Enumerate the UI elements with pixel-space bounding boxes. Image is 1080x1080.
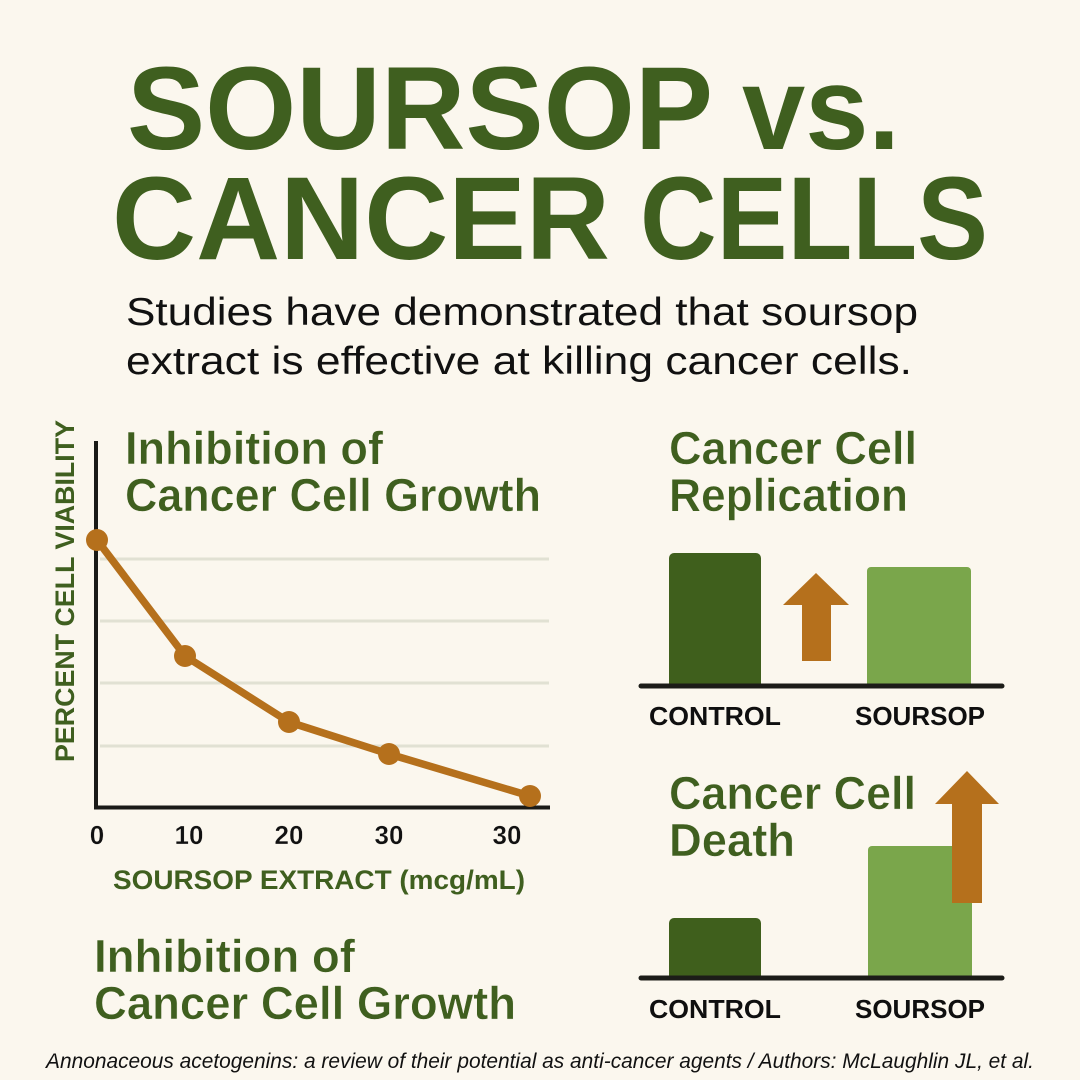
chart heading: Inhibition of <box>125 422 384 474</box>
lower left heading <box>94 930 516 1029</box>
replication heading: Replication <box>669 469 908 521</box>
chart axes <box>96 441 550 808</box>
x axis tick labels: 20 <box>275 820 303 850</box>
x axis tick labels: 0 <box>90 820 104 850</box>
lower left heading: Inhibition of <box>94 930 356 982</box>
control bar <box>669 553 761 685</box>
soursop bar <box>867 567 971 685</box>
soursop bar <box>868 846 972 977</box>
bar labels: SOURSOP <box>855 994 985 1024</box>
death heading: Cancer Cell <box>669 767 916 819</box>
title: vs. <box>742 43 900 175</box>
subtitle: Studies have demonstrated that soursop <box>126 291 918 334</box>
replication heading <box>669 422 917 521</box>
baseline <box>641 976 1002 980</box>
citation: Annonaceous acetogenins: a review of their potential as anti-cancer agents / Authors: McLaughlin JL, et al. <box>44 1050 1034 1073</box>
bar labels: CONTROL <box>649 994 781 1024</box>
x axis tick labels <box>90 820 521 850</box>
panel: cancer cell replication <box>641 422 1002 731</box>
bar labels: CONTROL <box>649 701 781 731</box>
title: CELLS <box>640 153 988 285</box>
x axis tick labels: 10 <box>175 820 203 850</box>
chart heading: Cancer Cell Growth <box>125 469 541 521</box>
y axis label: PERCENT CELL VIABILITY <box>50 420 80 762</box>
arrow: up <box>935 771 999 903</box>
bar labels: SOURSOP <box>855 701 985 731</box>
subtitle <box>126 291 918 383</box>
death heading: Death <box>669 814 795 866</box>
death heading <box>669 767 916 866</box>
title <box>112 43 988 285</box>
bar labels <box>649 994 985 1024</box>
subtitle: extract is effective at killing cancer cells. <box>126 340 912 383</box>
replication heading: Cancer Cell <box>669 422 917 474</box>
panel: cancer cell death <box>641 767 1002 1024</box>
chart heading <box>125 422 541 521</box>
baseline <box>641 684 1002 688</box>
bar labels <box>649 701 985 731</box>
x axis tick labels: 30 <box>493 820 521 850</box>
panel: line chart <box>50 420 550 895</box>
lower left heading: Cancer Cell Growth <box>94 977 516 1029</box>
x axis tick labels: 30 <box>375 820 403 850</box>
title: SOURSOP <box>127 43 713 175</box>
control bar <box>669 918 761 977</box>
line series <box>86 529 541 807</box>
title: CANCER <box>112 153 610 285</box>
x axis label: SOURSOP EXTRACT (mcg/mL) <box>113 865 525 895</box>
arrow: up <box>783 573 849 661</box>
